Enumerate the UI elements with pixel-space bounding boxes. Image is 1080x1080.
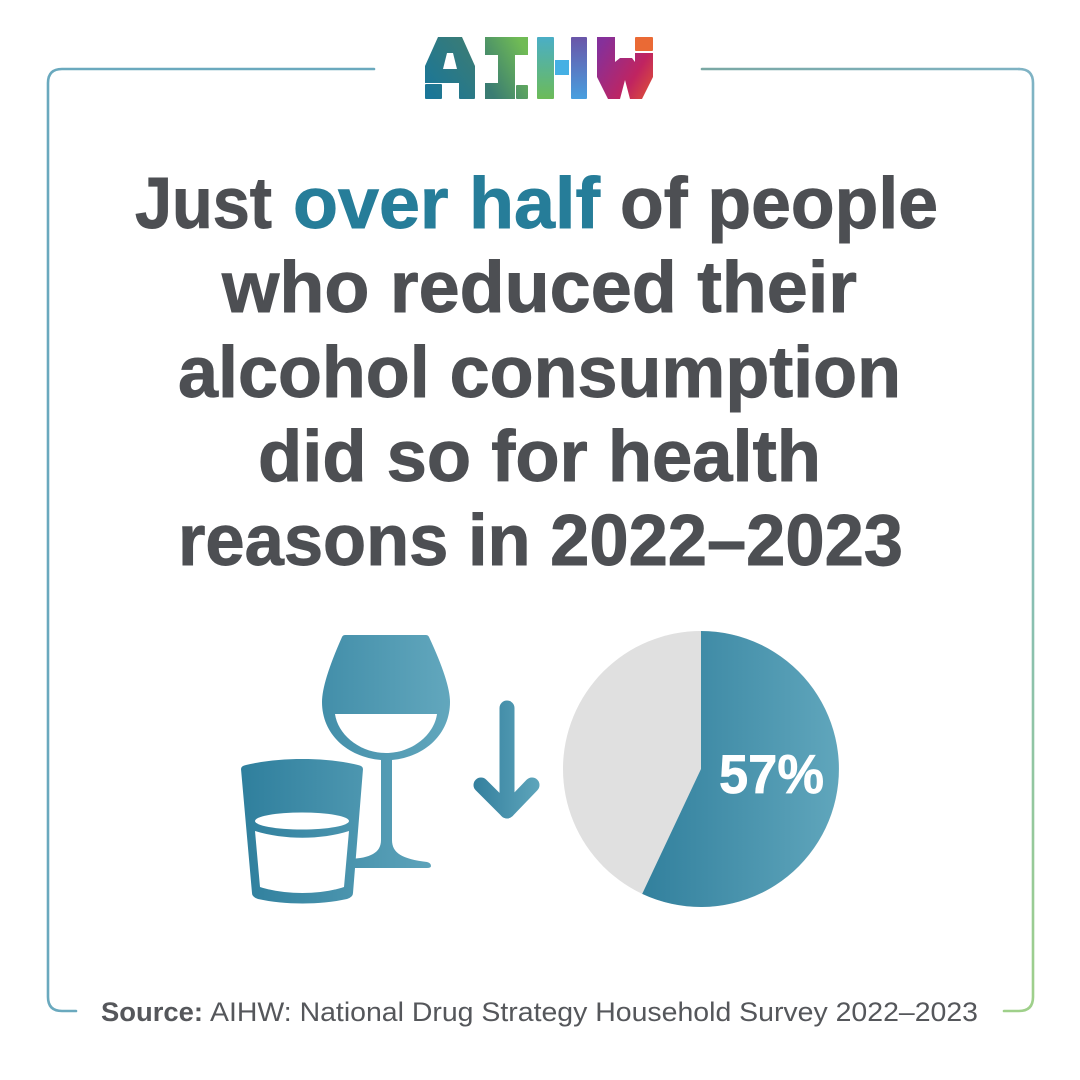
- frame border: [48, 69, 1033, 1011]
- source note: AIHW: National Drug Strategy Household Survey 2022–2023: [210, 997, 978, 1027]
- AIHW logo: [425, 37, 653, 99]
- title: who reduced their: [221, 248, 857, 328]
- title: did so for health: [258, 417, 821, 497]
- pie chart: 57%: [563, 631, 839, 907]
- arrow: down: [481, 708, 532, 811]
- icon: tumbler glass: [236, 759, 368, 904]
- title: of people: [620, 164, 938, 244]
- pie label: 57%: [719, 743, 824, 805]
- title: reasons in 2022–2023: [178, 501, 903, 581]
- title: [135, 164, 938, 581]
- source note: Source:: [101, 997, 203, 1027]
- title: over half: [293, 164, 601, 244]
- title: Just: [135, 164, 272, 244]
- title: alcohol consumption: [178, 333, 901, 413]
- icon: wine glass: [322, 635, 450, 868]
